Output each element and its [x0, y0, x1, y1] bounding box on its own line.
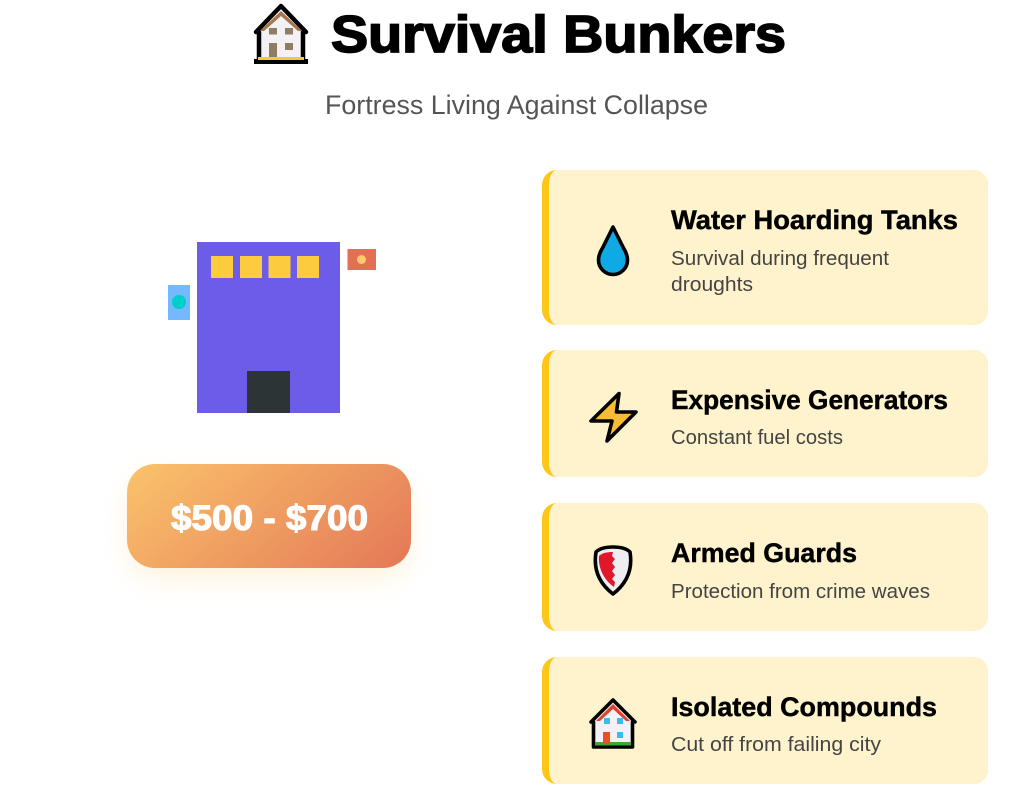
- water tank: [168, 285, 190, 320]
- card title: Armed Guards: [671, 538, 857, 568]
- card description: Constant fuel costs: [671, 426, 843, 449]
- bunker illustration: [168, 242, 376, 413]
- price badge: $500 - $700: [171, 499, 368, 538]
- card background: [542, 170, 988, 325]
- card background: [542, 350, 988, 477]
- heading text: Survival Bunkers: [331, 6, 786, 64]
- building body: [197, 242, 340, 413]
- panel: armed guards: [542, 503, 988, 631]
- icon: house: [254, 6, 308, 64]
- card description: Protection from crime waves: [671, 580, 930, 603]
- door: [247, 371, 290, 413]
- panel: expensive generators: [542, 350, 988, 477]
- card description: droughts: [671, 273, 753, 296]
- subtitle: Fortress Living Against Collapse: [325, 90, 708, 120]
- card title: Isolated Compounds: [671, 692, 937, 722]
- card background: [542, 657, 988, 784]
- card description: Cut off from failing city: [671, 733, 882, 756]
- card title: Expensive Generators: [671, 385, 948, 415]
- icon: house: [591, 700, 635, 747]
- card title: Water Hoarding Tanks: [671, 205, 958, 235]
- panel: isolated compounds: [542, 657, 988, 784]
- card background: [542, 503, 988, 631]
- generator: [348, 249, 376, 270]
- card description: Survival during frequent: [671, 247, 889, 270]
- windows: [211, 256, 319, 278]
- title: [254, 6, 786, 64]
- icon: shield: [595, 547, 631, 594]
- icon: lightning bolt: [591, 394, 636, 441]
- card description: [671, 247, 889, 296]
- icon: water drop: [598, 227, 628, 274]
- panel: water hoarding tanks: [542, 170, 988, 325]
- price badge: [127, 464, 411, 576]
